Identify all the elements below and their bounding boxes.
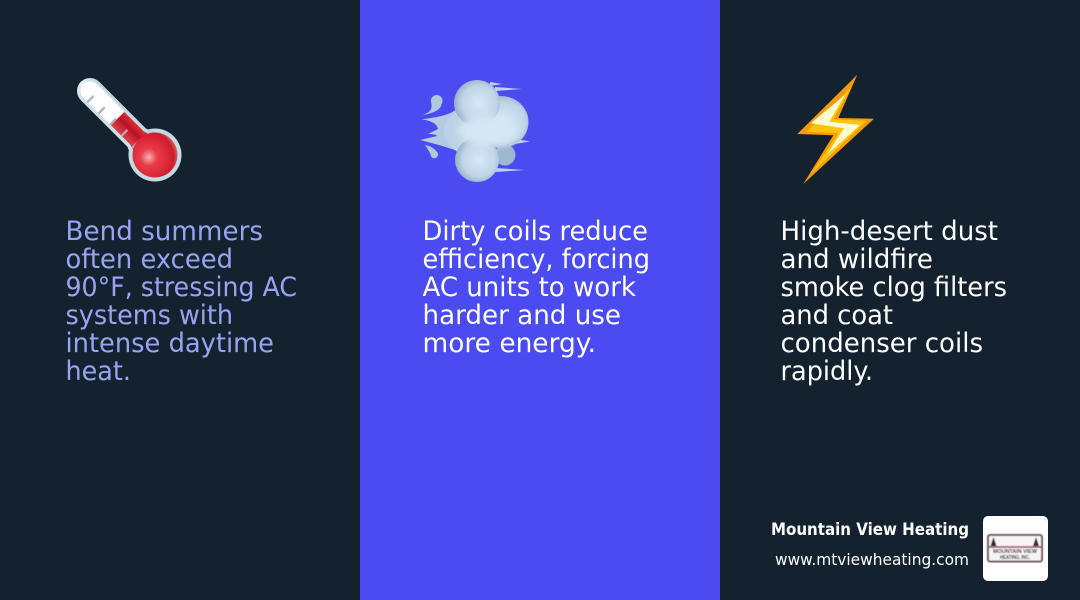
- text block: left: often exceed: [66, 244, 233, 275]
- text block: center: Dirty coils reduce: [422, 216, 648, 247]
- panel: center background: [360, 0, 720, 600]
- text block: left: 90°F, stressing AC: [66, 272, 297, 303]
- icon: lightning bolt: [797, 75, 874, 184]
- logo: HEATING, INC.: [1000, 555, 1030, 561]
- icon: thermometer: [66, 67, 182, 182]
- text block: right: and coat: [780, 300, 893, 331]
- website: www.mtviewheating.com: [775, 550, 969, 569]
- text block: center: AC units to work: [422, 272, 636, 303]
- text block: left: [66, 216, 297, 387]
- text block: left: heat.: [66, 356, 131, 387]
- text block: right: High-desert dust: [780, 216, 998, 247]
- logo: MOUNTAIN VIEW: [993, 549, 1038, 555]
- text block: right: smoke clog filters: [780, 272, 1007, 303]
- panel: right background: [720, 0, 1080, 600]
- text block: left: Bend summers: [66, 216, 263, 247]
- text block: right: condenser coils: [780, 328, 983, 359]
- logo: [983, 516, 1048, 581]
- text block: center: [422, 216, 650, 359]
- text block: center: harder and use: [422, 300, 621, 331]
- panel: left background: [0, 0, 360, 600]
- text block: left: intense daytime: [66, 328, 274, 359]
- text block: center: more energy.: [422, 328, 596, 359]
- text block: right: rapidly.: [780, 356, 873, 387]
- text block: right: [780, 216, 1007, 387]
- text block: center: efficiency, forcing: [422, 244, 650, 275]
- icon: dust cloud: [420, 80, 530, 182]
- text block: right: and wildfire: [780, 244, 933, 275]
- text block: left: systems with: [66, 300, 233, 331]
- brand name: Mountain View Heating: [771, 520, 969, 540]
